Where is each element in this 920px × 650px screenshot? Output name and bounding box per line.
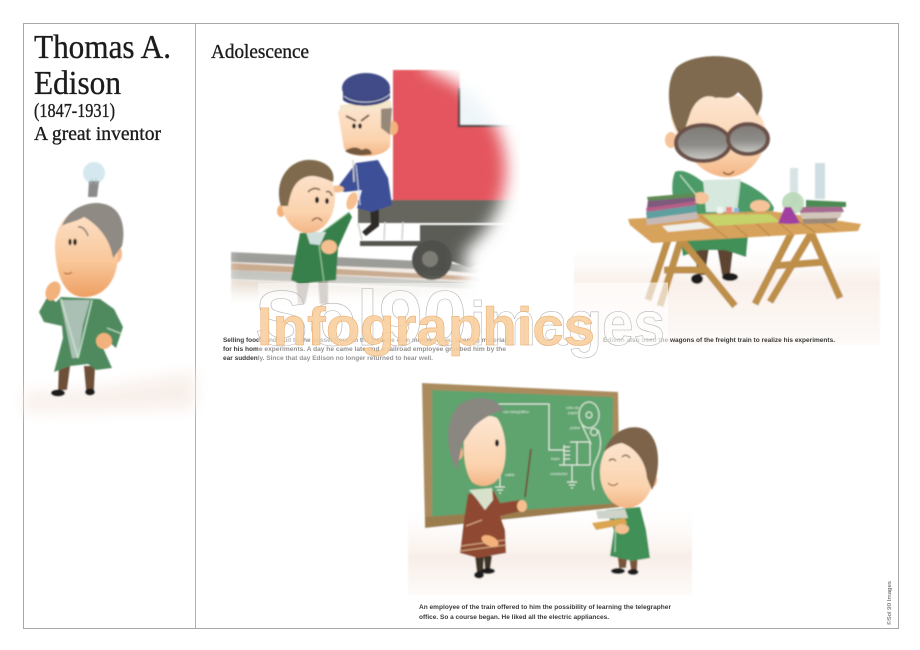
caption: telegraph course: An employee of the train offered to him the possibility of learning the telegrapher [419,604,671,611]
coat tail [680,234,748,257]
coat [672,171,774,222]
caption: telegraph course [419,604,671,621]
caption: train incident: Selling foods and fruit to the passengers on the train he earn money for purchasing materials [223,337,510,344]
caption: freight train lab: Edison also used the wagons of the freight train to realize his experiments. [603,337,835,344]
icon: light bulb [83,162,105,197]
book stack right [800,200,846,224]
book stack left [646,193,698,225]
chalkboard: cable [505,472,515,477]
watermark: Sol90images: images [470,290,665,359]
caption: train incident: for his home experiments. A day he came late and a railroad employee grabbed him by the [223,346,506,353]
train and rails [231,70,523,305]
watermark: Sol90images [255,274,668,363]
table trestles [648,230,840,306]
boy's legs and shoes [691,240,738,284]
illustration: ejected from the train [231,70,523,305]
telegraph diagram [490,402,601,493]
floor shadow [408,500,692,595]
boy with telegraph device [592,427,658,575]
conductor [330,73,398,236]
head with goggles [665,56,768,177]
green coat [39,296,123,372]
chalkboard: base [551,456,560,461]
title: Thomas A. [34,29,171,66]
teacher [448,398,531,578]
boy grabbed by the ear [277,160,360,304]
caption: train incident [223,337,510,362]
chalkboard [422,383,620,528]
illustration: Edison thinking [24,162,195,412]
watermark: Sol90images: Sol90 [255,274,467,362]
title: (1847-1931) [34,100,115,122]
title: Edison [34,65,121,102]
floor shadow [24,372,195,412]
chalkboard: conductor [550,471,568,476]
title: A great inventor [34,123,161,145]
floor shadow [574,240,880,345]
chalkboard: rollo de [566,405,580,410]
credit: ©Sol 90 Images [886,581,893,625]
table top [628,211,861,243]
chalkboard: papel [568,410,578,415]
glassware [778,163,825,224]
chalkboard: polea [570,425,581,430]
caption: telegraph course: office. So a course began. He liked all the electric appliances. [419,614,609,621]
heading: Adolescence: Adolescence [211,41,309,63]
hands and gadget [693,192,770,214]
hands [42,279,112,349]
illustration: lab on the freight train [574,56,880,345]
legs and shoes [51,366,95,396]
chalkboard: uso telegráfico [503,409,530,414]
watermark: Infographics: Infographics [257,297,595,357]
illustration: telegraph lesson [408,383,692,595]
caption: train incident: ear suddenly. Since that day Edison no longer returned to hear well. [223,355,433,362]
head [55,203,123,297]
title [34,29,171,145]
